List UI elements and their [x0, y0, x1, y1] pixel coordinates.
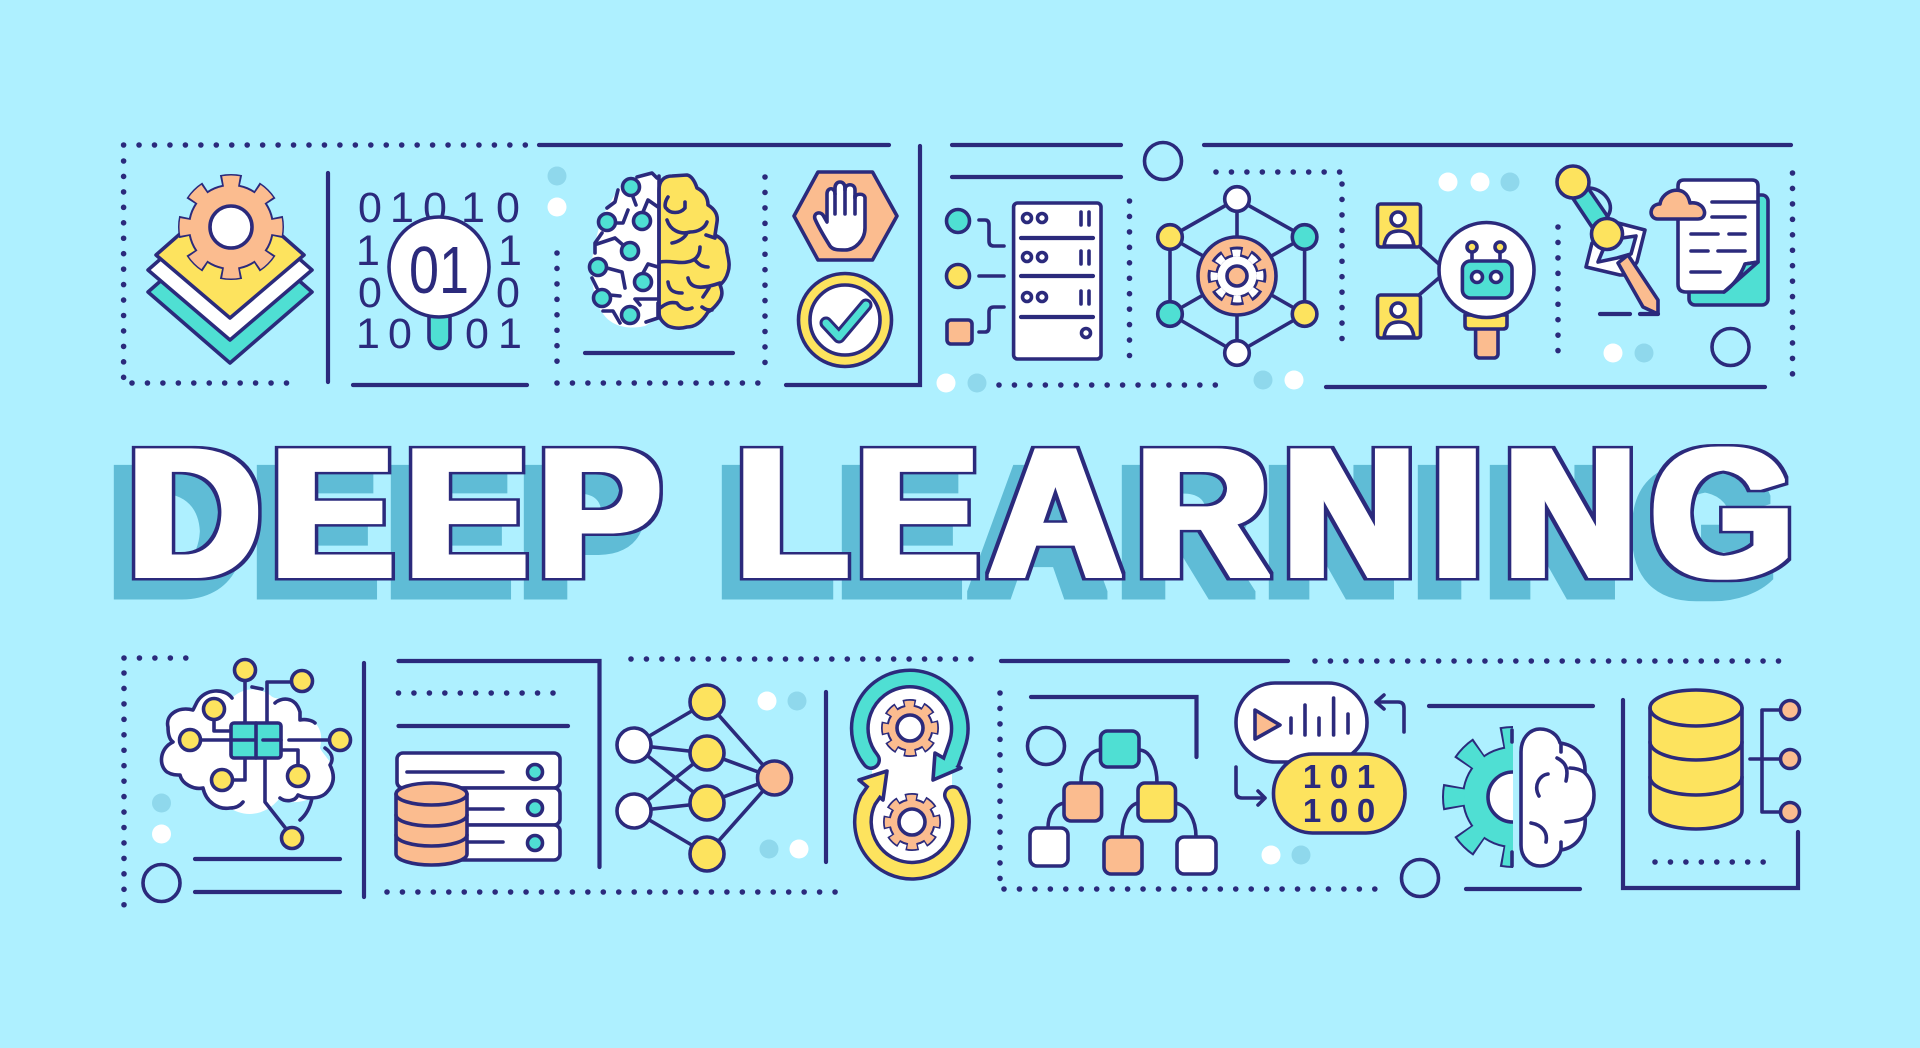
digits in lens: 01: [409, 233, 469, 308]
title shadow: DEEPLEARNING: [110, 428, 1776, 634]
icon: half circuit half organic brain: [590, 173, 729, 328]
binary digits: 11: [356, 227, 522, 275]
gear: upper: [886, 704, 934, 752]
icon: document with cloud: [1651, 180, 1768, 305]
binary digits: 1001: [356, 310, 522, 358]
icon: robot in magnifier with users: [1378, 204, 1534, 358]
icon: hexagonal network with gear: [1158, 187, 1317, 365]
icon: database with connections: [1650, 690, 1800, 829]
binary digits: 00: [358, 269, 520, 317]
magnifier handle: [429, 314, 450, 348]
icon: decision tree: [1030, 731, 1216, 874]
audio bubble: [1236, 683, 1367, 762]
icon: server rack with nodes: [946, 203, 1101, 359]
icon: gear and brain halves: [1455, 729, 1594, 866]
icon: audio to binary conversion: 101: [1303, 758, 1375, 795]
icon: audio to binary conversion: 100: [1303, 792, 1375, 829]
icon: check mark badge: [798, 274, 892, 366]
icon: layers with gear: [148, 182, 312, 363]
magnifier lens: [389, 217, 489, 317]
binary bubble: [1274, 754, 1405, 833]
icon: compass and pencil: [1557, 166, 1658, 314]
gear: lower: [888, 798, 936, 846]
binary digits: 01010: [358, 184, 520, 232]
top frame lines and dots: [124, 142, 1793, 392]
conversion arrows: [1236, 695, 1404, 805]
title lettering: DEEPLEARNING: [128, 410, 1794, 616]
icon: brain with chip: [161, 660, 350, 848]
bottom frame lines and dots: [124, 658, 1798, 906]
icon: stop hand in hexagon: [794, 172, 897, 260]
icon: audio to binary conversion: [1236, 683, 1405, 833]
title: DEEP LEARNING: [110, 410, 1794, 634]
icon: infinity loop with gears: [859, 678, 961, 871]
icon: binary code under magnifier: [356, 184, 522, 358]
icon: server with database: [396, 753, 560, 865]
icon: neural network: [617, 685, 792, 871]
binary digits: [356, 184, 522, 358]
